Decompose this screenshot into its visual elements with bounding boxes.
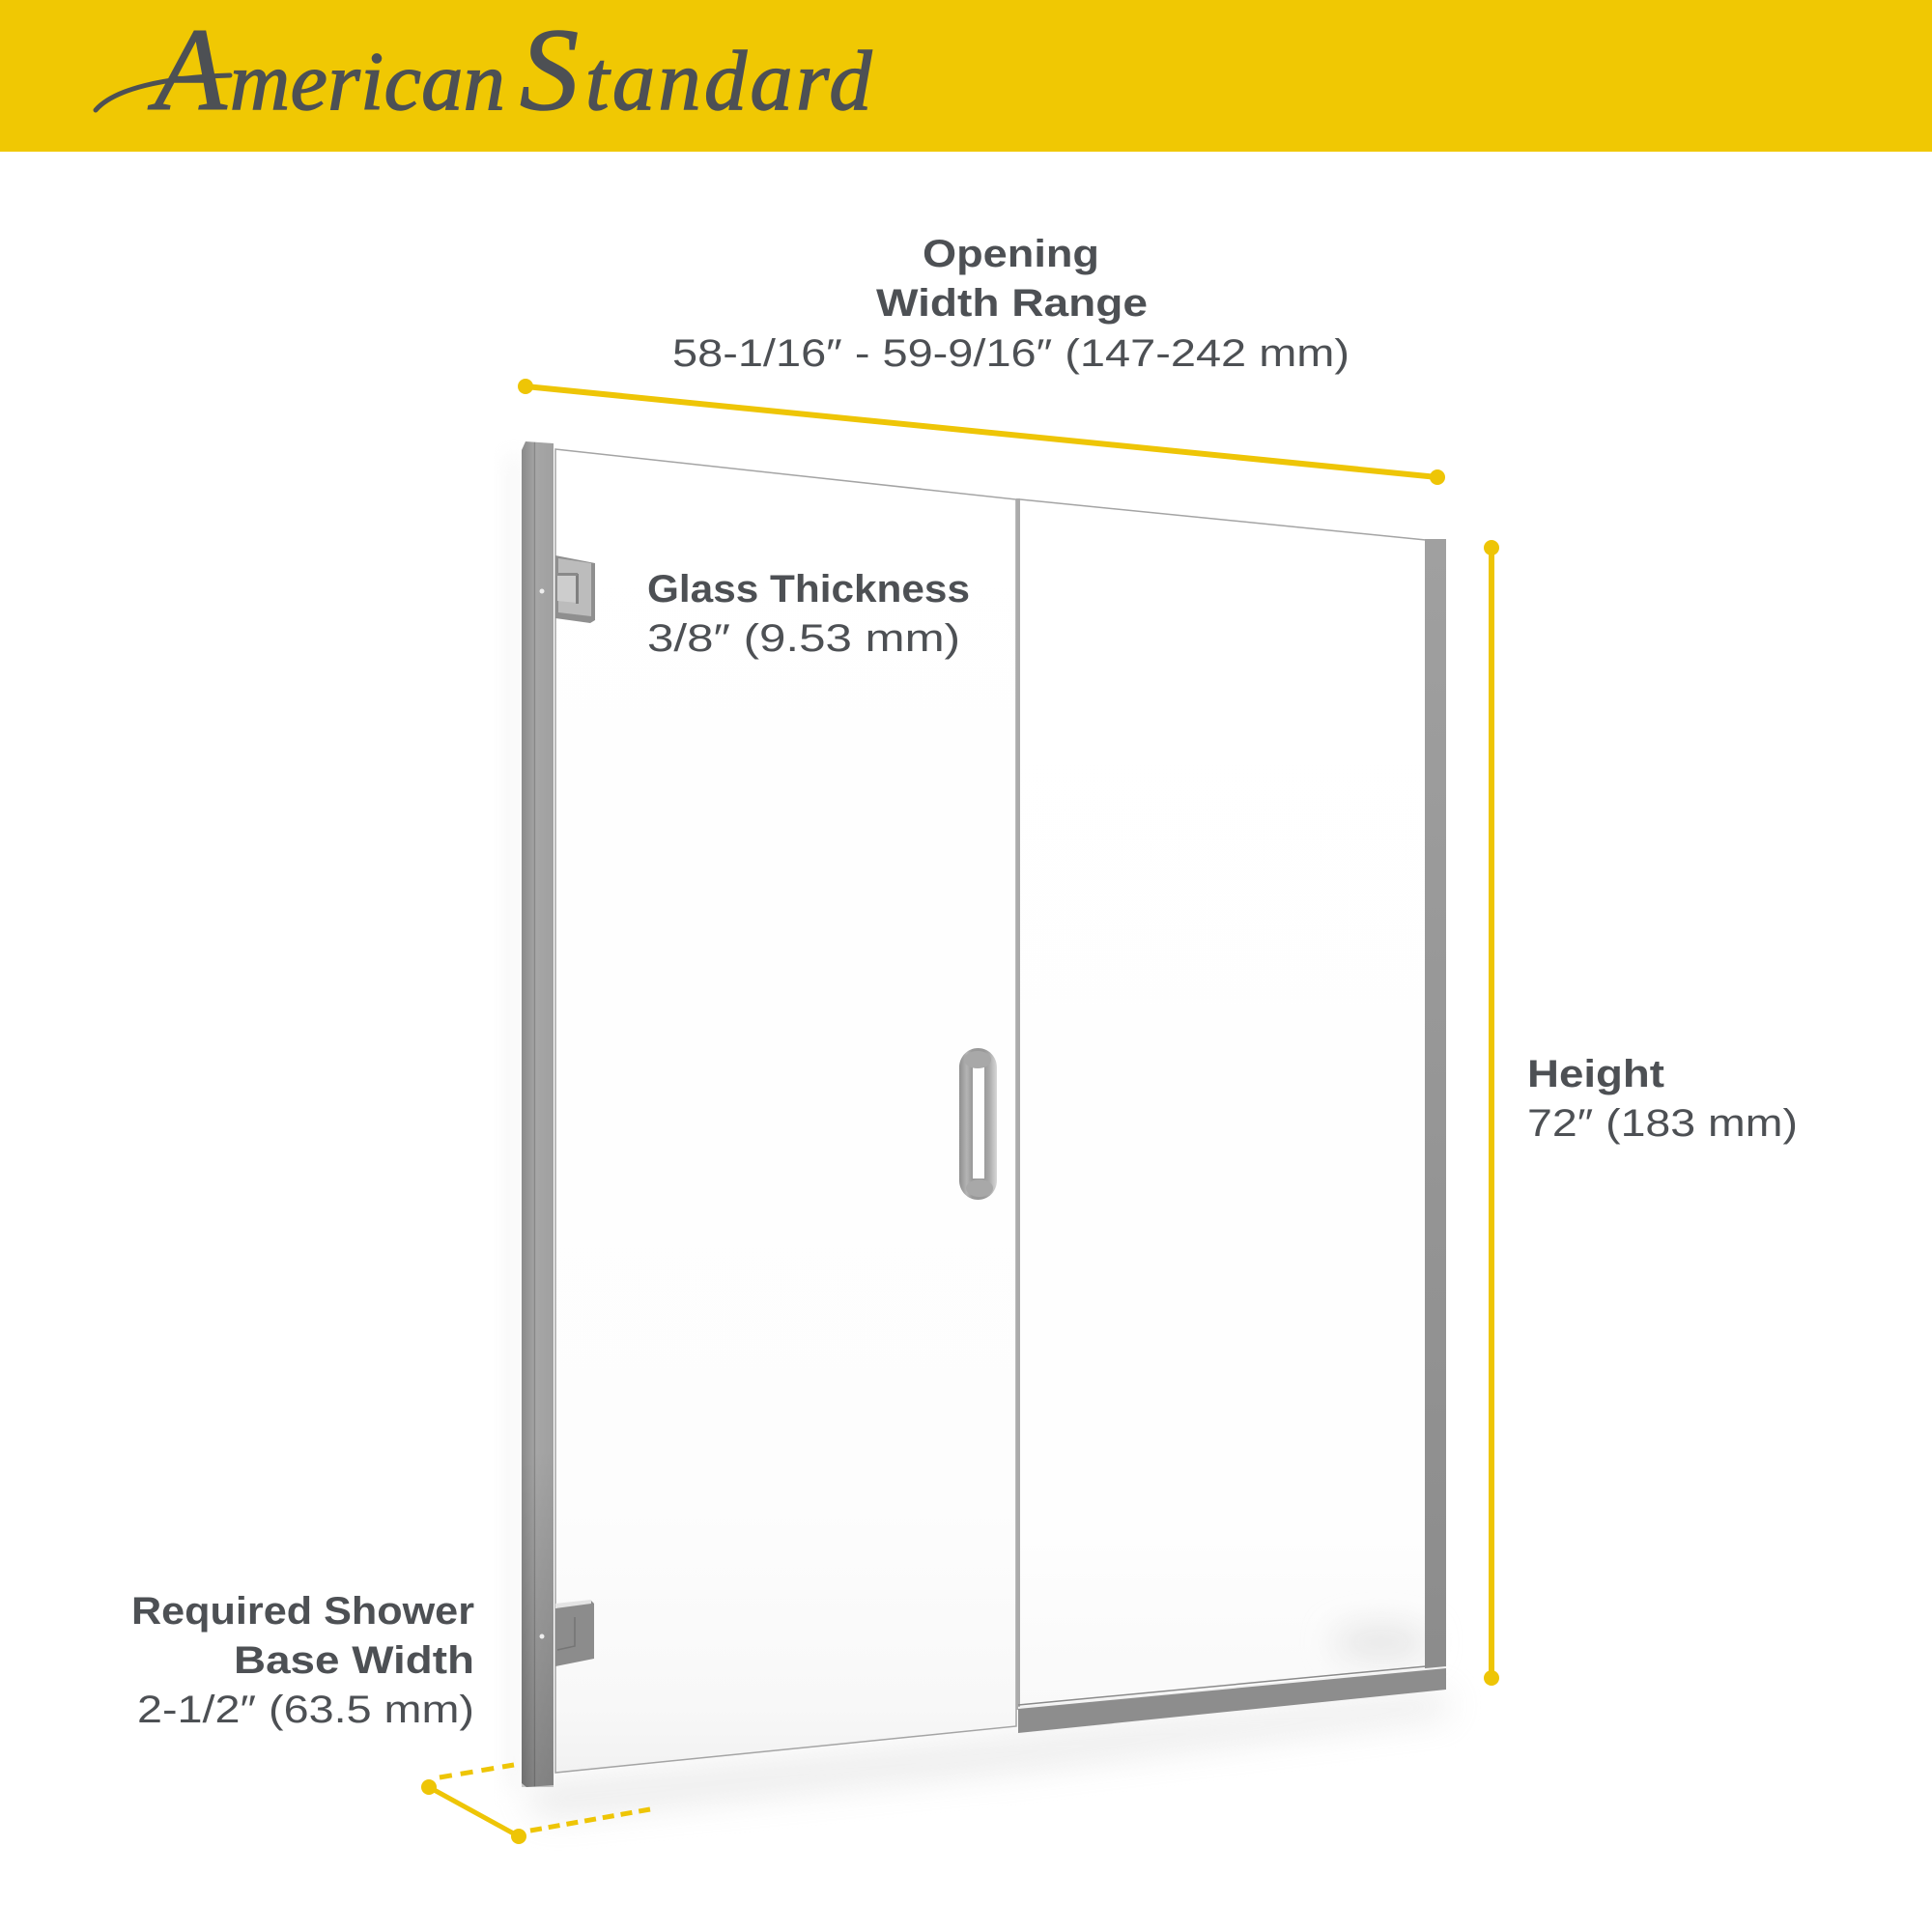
logo wordmark: merican [230,35,505,128]
label: glass thickness [647,568,970,660]
floor shadows [507,454,1449,1816]
label: required shower base width [131,1590,474,1731]
label: height: 72″ (183 mm) [1527,1102,1798,1145]
logo flourish [96,75,230,110]
label: opening width range: Opening [923,233,1099,275]
label: opening width range [672,233,1350,375]
label: required shower base width: 2-1/2″ (63.5 mm) [137,1689,474,1731]
label: opening width range: 58-1/16″ - 59-9/16″ (147-242 mm) [672,332,1350,375]
shower door illustration [507,441,1449,1816]
right door glass panel [1020,499,1426,1708]
logo wordmark: tandard [585,35,875,128]
glass divider edge [1016,498,1020,1710]
top hinge [555,555,595,623]
label: required shower base width: Required Shower [131,1590,474,1633]
label: opening width range: Width Range [876,282,1148,325]
logo wordmark: S [520,5,579,135]
height dimension line [1484,540,1499,1686]
right wall post [1425,539,1446,1669]
label: glass thickness: Glass Thickness [647,568,970,611]
wall rail [522,441,554,1787]
logo wordmark: A [148,5,227,135]
label: glass thickness: 3/8″ (9.53 mm) [647,617,960,660]
label: required shower base width: Base Width [234,1639,474,1682]
door handle [959,1048,997,1200]
corner glass shading [1333,1625,1430,1660]
opening width dimension line [518,379,1445,485]
label: height [1527,1053,1798,1145]
header banner [0,0,1932,152]
base width dimension line [421,1765,650,1844]
threshold sill [1018,1666,1446,1733]
bottom hinge [555,1600,594,1666]
label: height: Height [1527,1053,1664,1095]
left fixed glass panel [555,449,1016,1773]
